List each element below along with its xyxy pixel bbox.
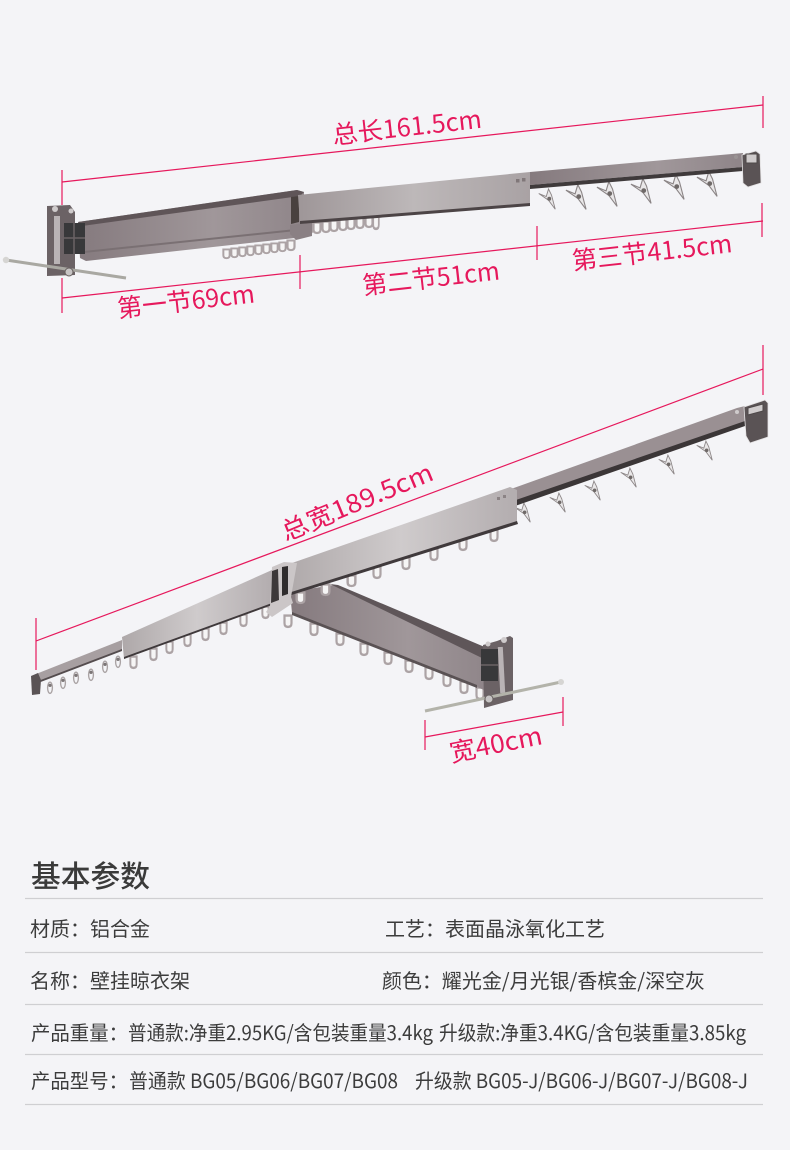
- bottom diagram: extended rack: [31, 345, 768, 770]
- row: model: [31, 1065, 748, 1094]
- clips on right section: [515, 441, 712, 522]
- row: weight: 普通款:净重2.95KG/含包装重量3.4kg: [128, 1017, 433, 1046]
- hooks under section one: [223, 240, 294, 258]
- label: total length: 总长161.5cm: [330, 100, 483, 152]
- row: material and process: [30, 913, 605, 942]
- section one arm: [78, 190, 312, 261]
- top diagram: folded rack: [3, 96, 763, 325]
- hooks under left section: [130, 607, 269, 668]
- section two tube: [298, 172, 530, 224]
- label: depth: 宽40cm: [446, 716, 545, 770]
- middle section tube: [285, 487, 518, 597]
- row: name and colour: [30, 965, 705, 994]
- section three tube: [530, 153, 743, 189]
- label: section one: 第一节69cm: [115, 275, 256, 325]
- hooks under section two: [306, 216, 379, 233]
- label: section two: 第二节51cm: [360, 252, 501, 302]
- angled arm: [290, 584, 487, 690]
- hooks under right section: [297, 530, 498, 603]
- hooks under arm: [284, 616, 484, 699]
- end cap: [734, 151, 761, 187]
- wall bracket: [481, 636, 513, 708]
- row: name and colour: 名称：壁挂晾衣架: [30, 965, 190, 994]
- row: model: 产品型号：: [31, 1065, 128, 1094]
- dimension line: depth: [425, 697, 563, 750]
- wall bracket: [47, 205, 85, 276]
- row: model: 普通款 BG05/BG06/BG07/BG08: [129, 1065, 398, 1094]
- label: section three: 第三节41.5cm: [570, 224, 734, 278]
- steel rod: [3, 257, 126, 278]
- leftmost tube: [36, 640, 122, 683]
- row: name and colour: 颜色：耀光金/月光银/香槟金/深空灰: [382, 965, 705, 994]
- row: weight: 升级款:净重3.4KG/含包装重量3.85kg: [439, 1017, 746, 1046]
- steel rod: [425, 679, 564, 711]
- center joint: [266, 562, 297, 617]
- row: weight: [31, 1017, 746, 1046]
- label: total width: 总宽189.5cm: [275, 453, 438, 549]
- row: material and process: 材质：铝合金: [30, 913, 150, 942]
- row: model: 升级款 BG05-J/BG06-J/BG07-J/BG08-J: [415, 1065, 748, 1094]
- dimension line: total width: [36, 345, 763, 670]
- dimension line: three sections: [62, 203, 763, 313]
- clips on section three: [539, 172, 717, 209]
- left end cap: [31, 673, 41, 695]
- parameters section: [25, 852, 763, 1104]
- row: weight: 产品重量：: [31, 1017, 128, 1046]
- clips left end: [48, 656, 120, 693]
- dimension line: total length: [62, 96, 763, 205]
- right narrow tube: [511, 406, 745, 506]
- row rules: [25, 898, 763, 1104]
- end cap right: [744, 400, 768, 443]
- left section tube: [122, 570, 272, 659]
- heading: 基本参数: [31, 852, 150, 896]
- row: material and process: 工艺：表面晶泳氧化工艺: [385, 913, 605, 942]
